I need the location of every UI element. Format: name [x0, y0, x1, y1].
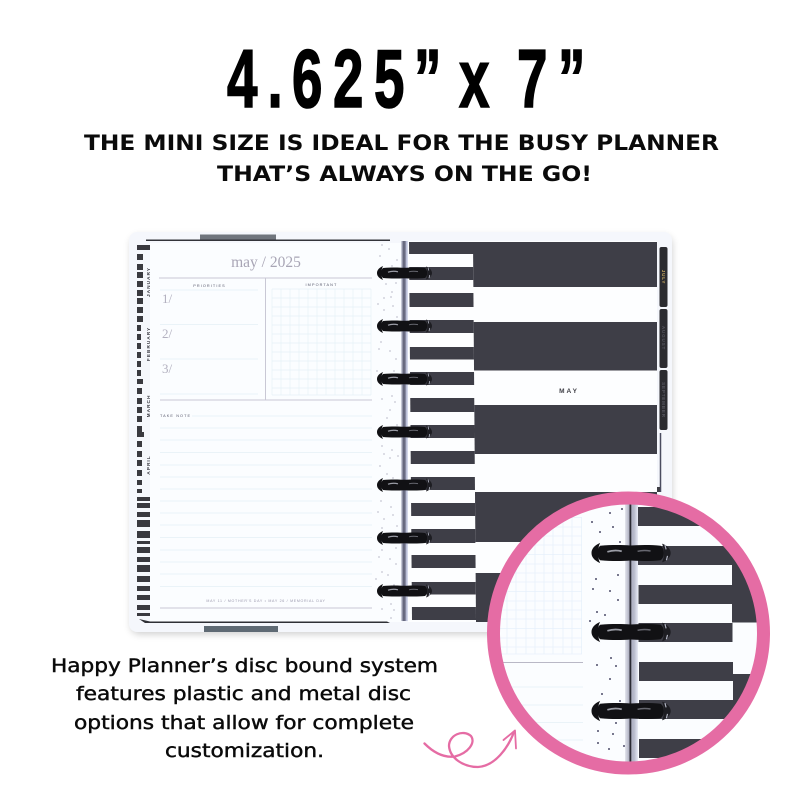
priorities block: 1/ [162, 291, 172, 306]
magnifier callout [490, 495, 773, 775]
tab labels: JANUARY [146, 267, 152, 297]
footer holidays: MAY 11 / MOTHER'S DAY • MAY 26 / MEMORIAL DAY [206, 599, 326, 603]
month tabs right: SEPTEMBER [661, 382, 666, 418]
subtitle [84, 131, 719, 187]
binding spine [401, 241, 409, 621]
binding discs [377, 266, 432, 598]
top band of left page [146, 234, 390, 241]
tab labels: MARCH [146, 395, 152, 417]
month tabs right: AUGUST [661, 326, 666, 350]
important grid [272, 283, 371, 395]
zoomed disc [592, 543, 671, 721]
tab labels [146, 267, 152, 475]
bottom description: features plastic and metal disc [76, 683, 411, 705]
take note lines [160, 414, 372, 586]
priorities block: 2/ [162, 326, 172, 341]
tab labels: APRIL [146, 455, 152, 475]
bottom description: Happy Planner’s disc bound system [51, 655, 438, 677]
take note lines: TAKE NOTE [160, 414, 191, 418]
panel: right page striped divider [408, 241, 672, 623]
perforation dots [375, 244, 399, 619]
subtitle: THAT’S ALWAYS ON THE GO! [217, 162, 592, 187]
subtitle: THE MINI SIZE IS IDEAL FOR THE BUSY PLANNER [84, 131, 719, 156]
month label: MAY [559, 388, 579, 395]
bottom edge of left page [139, 619, 390, 632]
tab labels: FEBRUARY [146, 327, 152, 361]
priorities block [160, 284, 258, 394]
lens contents [500, 504, 757, 762]
month tab strip [137, 245, 152, 616]
panel: planner cover [129, 232, 672, 632]
priorities block: PRIORITIES [193, 284, 226, 288]
priorities block: 3/ [162, 361, 172, 376]
pink ring [494, 498, 764, 768]
page frame rules [159, 278, 372, 608]
bottom description [51, 655, 438, 762]
month tabs right: JULY [661, 270, 666, 284]
important grid: IMPORTANT [306, 283, 337, 287]
panel: left page [150, 243, 402, 622]
bottom description: customization. [165, 740, 324, 762]
planner photo [129, 232, 672, 634]
icon: curly arrow [424, 730, 516, 767]
page heading: may / 2025 [231, 254, 301, 271]
bottom description: options that allow for complete [74, 712, 414, 734]
month tabs right [650, 247, 668, 492]
title: 4.625” x 7” [0, 31, 585, 125]
